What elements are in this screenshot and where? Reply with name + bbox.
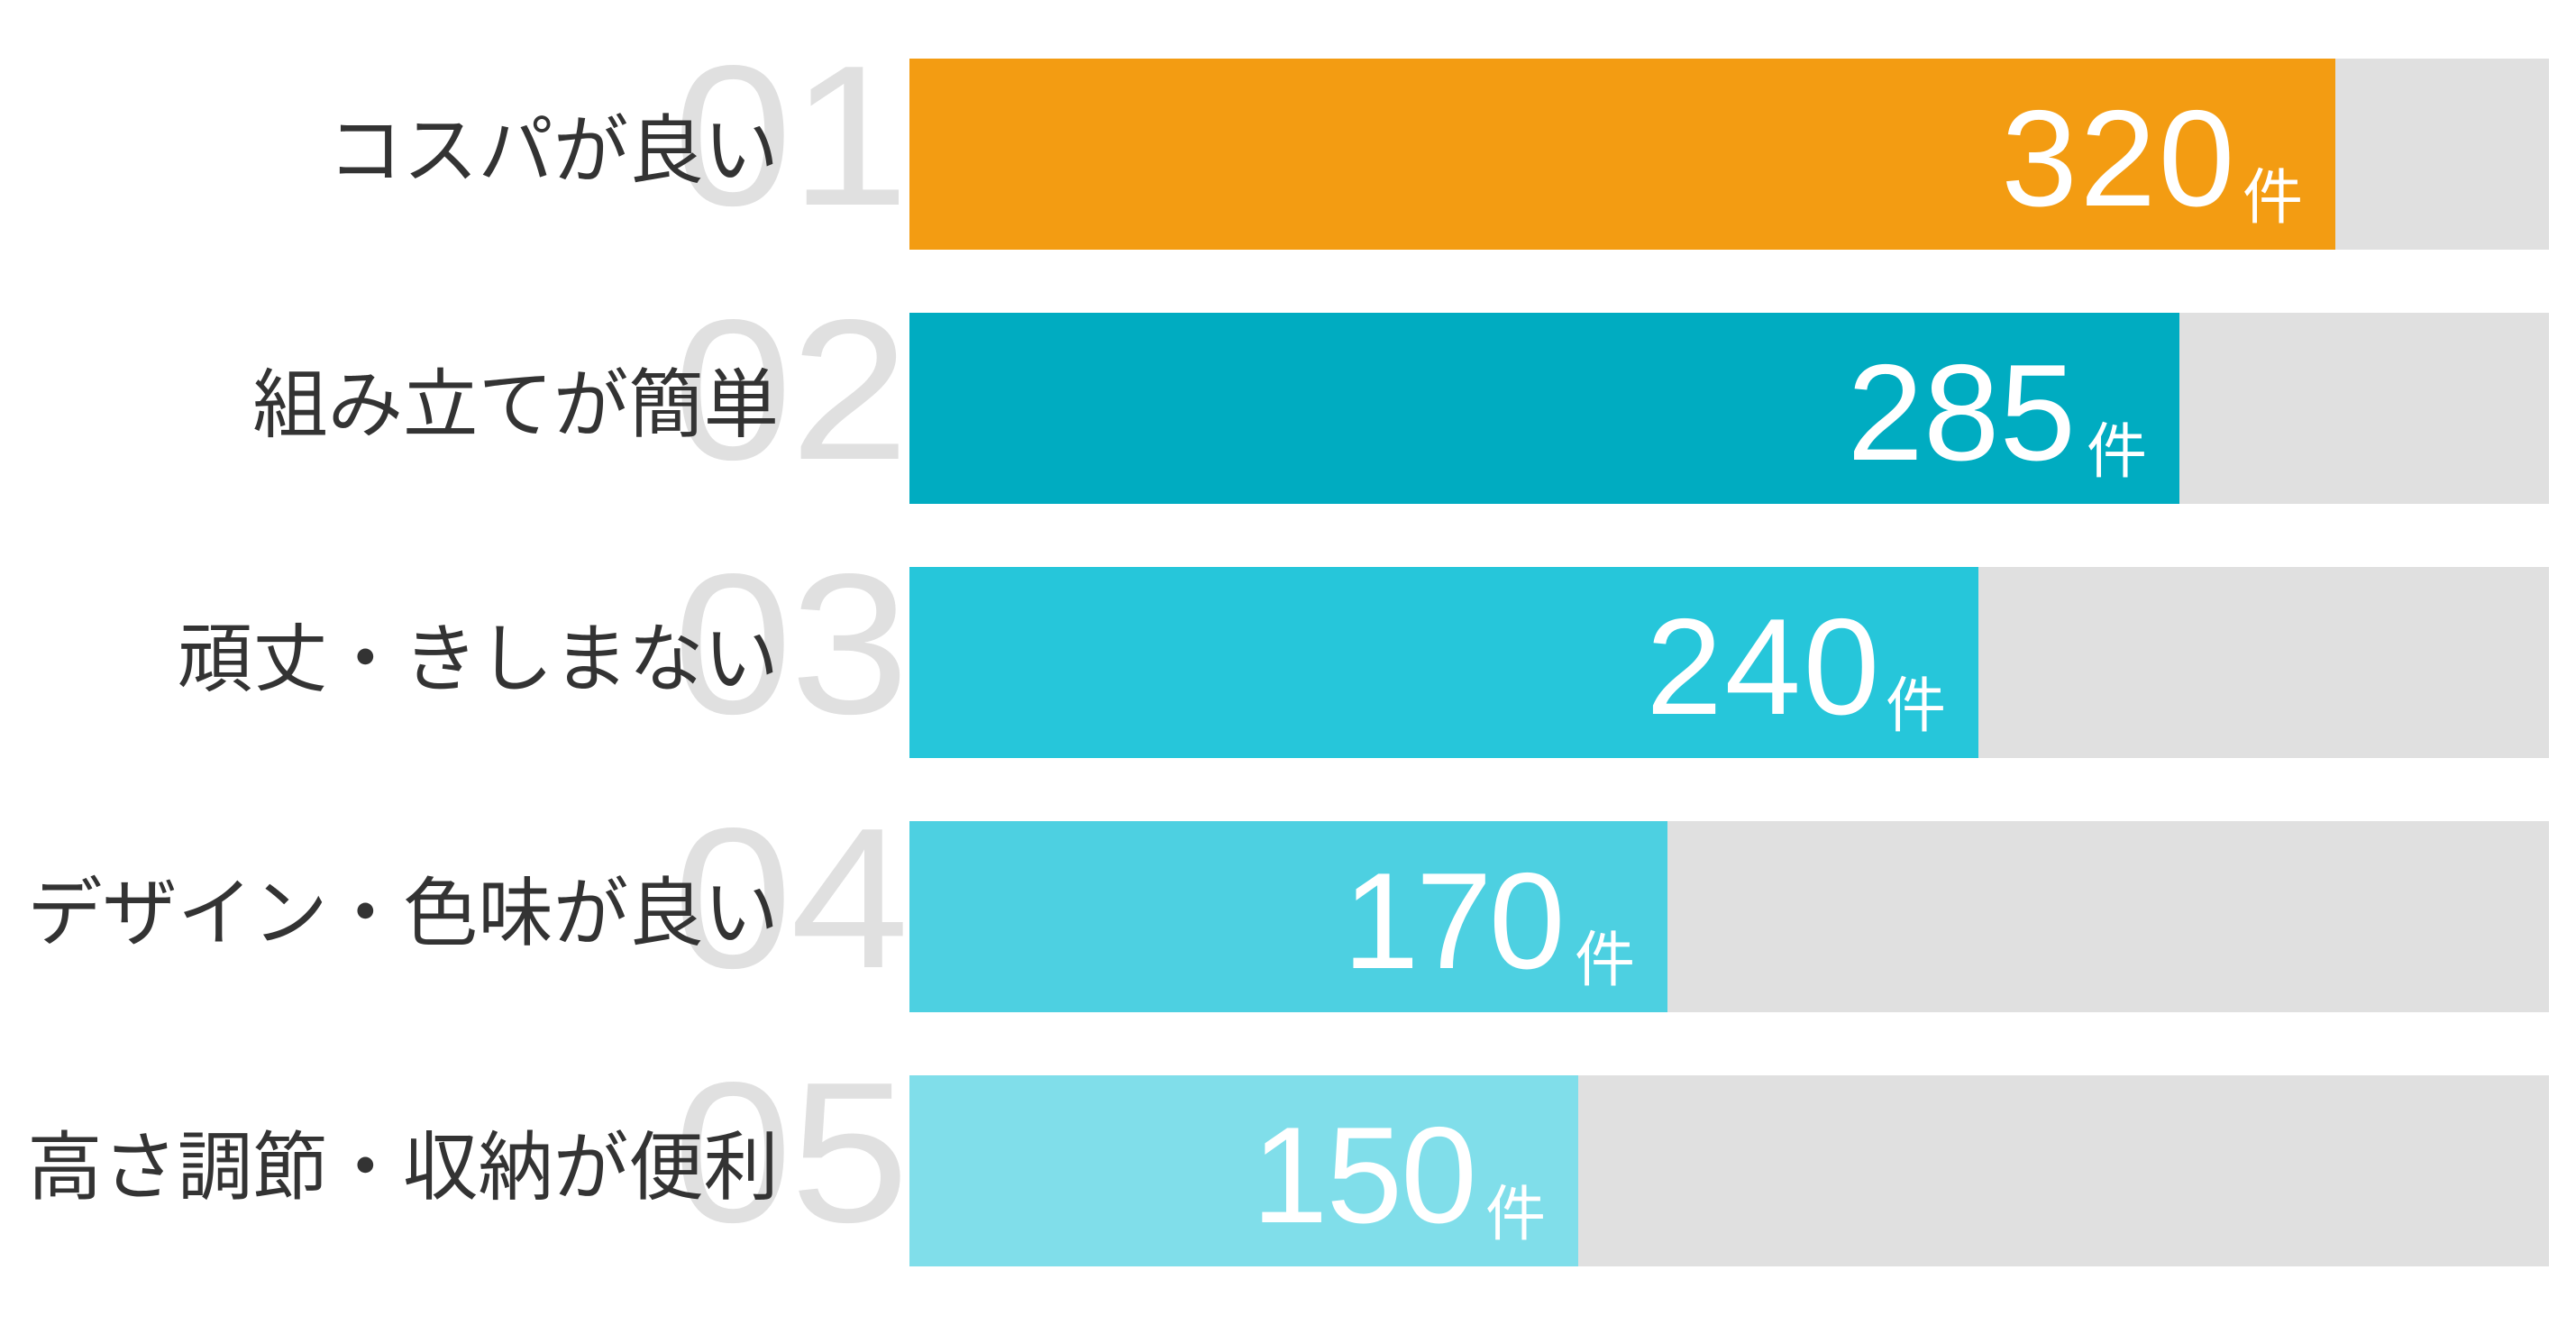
- label: 高さ調節・収納が便利: [27, 1126, 779, 1210]
- bar track: [909, 1075, 2549, 1266]
- label: 頑丈・きしまない: [178, 617, 779, 701]
- value: 285: [1847, 336, 2076, 489]
- rank number 02: 02: [673, 278, 909, 501]
- label: 組み立てが簡単: [252, 363, 779, 447]
- rank number 04: 04: [673, 786, 909, 1010]
- value: 170: [1343, 845, 1562, 998]
- unit: 件: [2087, 418, 2147, 486]
- bar track: [909, 821, 2549, 1012]
- row 5: 高さ調節・収納が便利: [27, 1040, 2549, 1266]
- unit: 件: [2243, 164, 2303, 232]
- row 1: コスパが良い: [328, 23, 2549, 250]
- rank number 01: 01: [673, 23, 909, 247]
- bar fill: [909, 313, 2179, 504]
- bar fill: [909, 59, 2335, 250]
- label: デザイン・色味が良い: [27, 872, 779, 955]
- unit: 件: [1575, 927, 1635, 994]
- row 2: 組み立てが簡単: [252, 278, 2549, 504]
- rank number 03: 03: [673, 532, 909, 755]
- bar track: [909, 567, 2549, 758]
- bar fill: [909, 821, 1667, 1012]
- unit: 件: [1886, 672, 1946, 740]
- bar fill: [909, 567, 1978, 758]
- bar fill: [909, 1075, 1578, 1266]
- value: 320: [2001, 82, 2237, 235]
- rank number 05: 05: [673, 1040, 909, 1264]
- row 4: デザイン・色味が良い: [27, 786, 2549, 1012]
- value: 240: [1646, 590, 1882, 744]
- value: 150: [1252, 1099, 1475, 1252]
- row 3: 頑丈・きしまない: [178, 532, 2549, 758]
- unit: 件: [1485, 1181, 1546, 1248]
- bar track: [909, 313, 2549, 504]
- label: コスパが良い: [328, 109, 779, 193]
- bar track: [909, 59, 2549, 250]
